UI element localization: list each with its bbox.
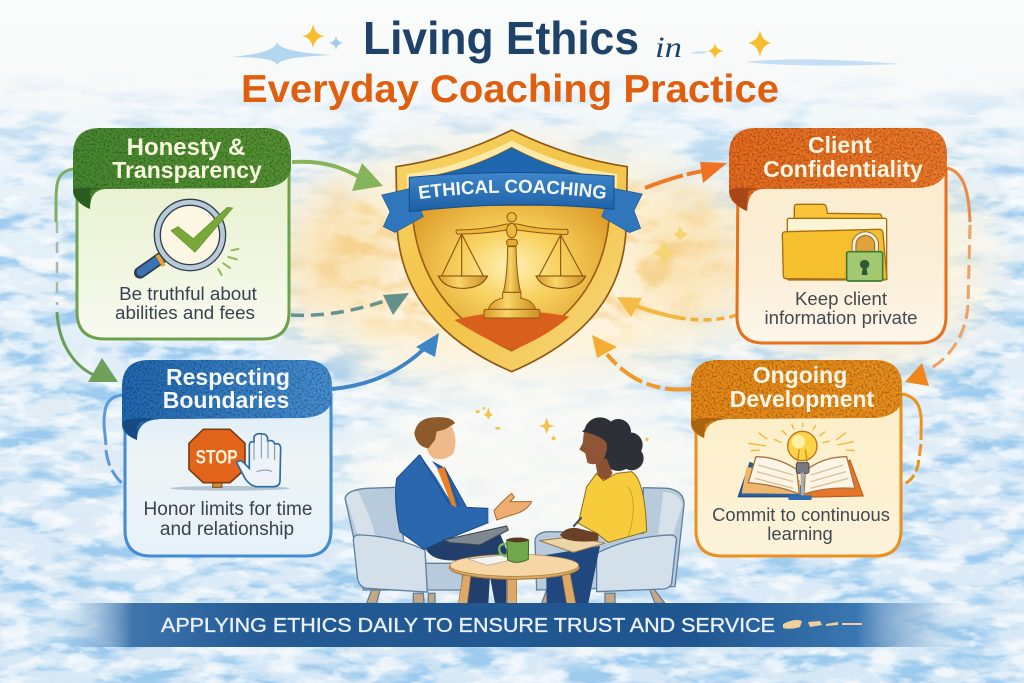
shield emblem bbox=[381, 129, 643, 372]
panel: honesty & transparency bbox=[73, 128, 291, 339]
ribbon fold bbox=[122, 418, 160, 440]
icon: book and light bulb bbox=[738, 423, 863, 500]
right armchair bbox=[535, 488, 684, 603]
heading text: Confidentiality bbox=[763, 156, 923, 182]
arrow: dashed slate to shield bbox=[291, 293, 409, 315]
shield blue crown bbox=[409, 147, 614, 179]
hair bbox=[584, 417, 644, 472]
heading text: Transparency bbox=[112, 157, 262, 183]
ribbon tails bbox=[382, 188, 423, 232]
arrow: green to shield bbox=[292, 162, 383, 191]
ribbon fold bbox=[691, 418, 728, 438]
ribbon heading bbox=[691, 360, 902, 438]
card body bbox=[77, 170, 289, 339]
card body bbox=[696, 395, 901, 556]
body text: Honor limits for time bbox=[144, 499, 312, 520]
title line 1: Living Ethics bbox=[363, 12, 639, 64]
arrow: orange to confidentiality bbox=[645, 162, 727, 188]
ribbon band bbox=[409, 172, 614, 212]
shield body bbox=[396, 130, 627, 372]
heading text: Client bbox=[808, 132, 872, 158]
icon: stop sign and hand: STOP bbox=[196, 447, 238, 468]
icon: stop sign and hand bbox=[170, 429, 290, 491]
card body bbox=[737, 170, 946, 343]
heading text: Honesty & bbox=[127, 134, 245, 161]
body text: Keep client bbox=[795, 288, 888, 309]
arrow: blue to shield bbox=[332, 333, 439, 389]
arrow: amber dashed to shield bbox=[592, 335, 691, 390]
icon: scales bbox=[438, 213, 586, 318]
illustration: coach and client bbox=[345, 407, 684, 603]
sparkles right of shield bbox=[652, 225, 688, 265]
coach: man bbox=[396, 417, 532, 603]
banner bbox=[60, 603, 965, 647]
title word: in: in bbox=[655, 31, 682, 64]
brush accent bbox=[783, 620, 862, 629]
body text: and relationship bbox=[160, 519, 294, 540]
arrow: amber loop right bbox=[901, 394, 921, 485]
icon: folder with padlock bbox=[782, 204, 887, 281]
ground bbox=[454, 312, 569, 351]
left armchair bbox=[345, 487, 463, 603]
ribbon heading bbox=[73, 128, 291, 209]
title line 2: Everyday Coaching Practice bbox=[241, 68, 779, 111]
arrow: orange loop right bbox=[905, 168, 970, 386]
body text: abilities and fees bbox=[115, 302, 255, 323]
body text: learning bbox=[767, 523, 833, 544]
arrow: green loop from honesty to boundaries bbox=[56, 169, 118, 382]
panel: client confidentiality bbox=[729, 128, 947, 343]
heading text: Development bbox=[730, 386, 875, 412]
heading text: Respecting bbox=[166, 364, 290, 390]
panel: ongoing development bbox=[691, 360, 902, 556]
title bbox=[241, 12, 779, 111]
coffee table bbox=[449, 538, 579, 603]
icon: green mug bbox=[499, 538, 529, 562]
arrow: blue loop bbox=[104, 395, 124, 485]
ribbon fold bbox=[73, 188, 105, 209]
card body bbox=[125, 395, 331, 556]
body text: Commit to continuous bbox=[712, 504, 890, 525]
ribbon heading bbox=[729, 128, 947, 211]
title sparkles bbox=[232, 24, 900, 66]
arrow: yellow dashed to shield bbox=[617, 297, 737, 320]
icon: magnifier with check bbox=[140, 202, 238, 275]
ribbon text: ETHICAL COACHING bbox=[418, 180, 606, 199]
ribbon fold bbox=[729, 188, 762, 211]
client: woman bbox=[539, 417, 647, 603]
body text: Be truthful about bbox=[119, 283, 258, 304]
heading text: Ongoing bbox=[753, 362, 847, 388]
panel: respecting boundaries bbox=[122, 360, 332, 556]
banner text: APPLYING ETHICS DAILY TO ENSURE TRUST AND SERVICE bbox=[161, 615, 775, 637]
sparkles bbox=[476, 407, 649, 441]
heading text: Boundaries bbox=[163, 387, 289, 413]
ribbon heading bbox=[122, 360, 332, 440]
inner field bbox=[412, 205, 610, 351]
body text: information private bbox=[765, 307, 917, 328]
